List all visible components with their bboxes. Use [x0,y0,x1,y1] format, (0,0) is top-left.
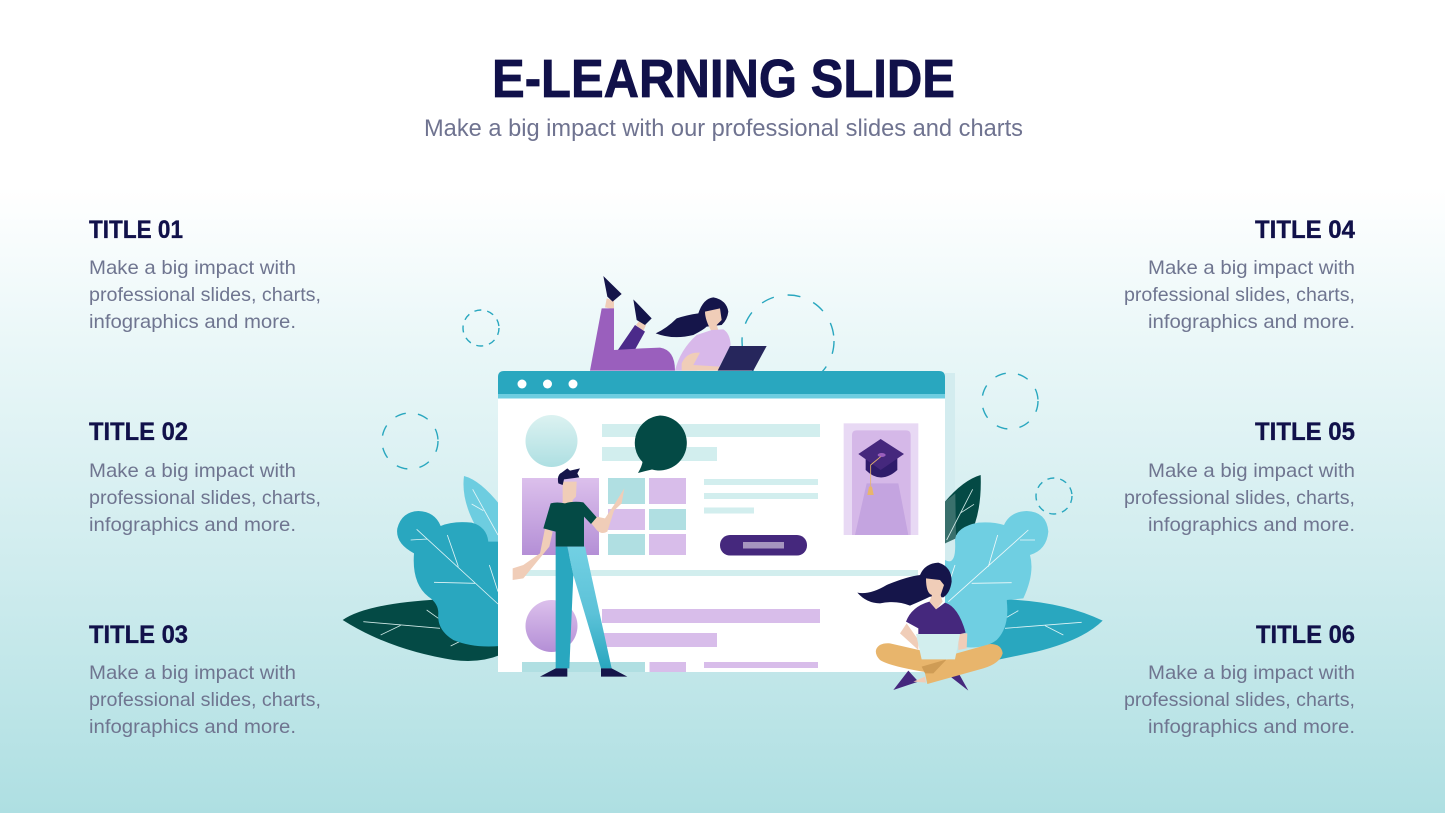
text block: title 03: professional slides, charts, [89,689,321,711]
text block: title 02: infographics and more. [89,514,296,536]
text block: title 05: TITLE 05 [1255,418,1355,446]
text block: title 03 [89,621,321,738]
text block: title 06 [1124,621,1355,738]
text block: title 01: Make a big impact with [89,257,296,279]
text block: title 04 [1124,216,1355,333]
text block: title 05: infographics and more. [1148,514,1355,536]
text block: title 06: Make a big impact with [1148,662,1355,684]
text block: title 02: Make a big impact with [89,460,296,482]
speech bubble [635,416,687,473]
text block: title 02 [89,418,321,536]
subtitle: Make a big impact with our professional slides and charts [424,115,1023,142]
text block: title 04: infographics and more. [1148,311,1355,333]
browser window [498,371,945,672]
text block: title 01: infographics and more. [89,311,296,333]
text block: title 02: professional slides, charts, [89,487,321,509]
text block: title 06: professional slides, charts, [1124,689,1355,711]
text block: title 01: professional slides, charts, [89,284,321,306]
left foliage [343,476,500,661]
graduation cap card [844,423,918,535]
text block: title 04: TITLE 04 [1255,216,1355,244]
text block: title 01 [89,216,321,333]
text block: title 06: infographics and more. [1148,716,1355,738]
text block: title 03: infographics and more. [89,716,296,738]
woman lying on window [590,276,767,371]
woman sitting with laptop [857,563,1003,691]
dashed circles [382,295,1072,514]
text block: title 04: Make a big impact with [1148,257,1355,279]
title: E-LEARNING SLIDE [492,49,955,109]
text block: title 02: TITLE 02 [89,418,188,446]
man pointing [513,468,627,677]
text block: title 05 [1124,418,1355,536]
text block: title 04: professional slides, charts, [1124,284,1355,306]
right foliage [945,475,1103,660]
text block: title 05: Make a big impact with [1148,460,1355,482]
text block: title 06: TITLE 06 [1256,621,1355,649]
text block: title 05: professional slides, charts, [1124,487,1355,509]
window shadow [945,373,955,672]
text block: title 03: TITLE 03 [89,621,188,649]
text block: title 03: Make a big impact with [89,662,296,684]
text block: title 01: TITLE 01 [89,216,183,244]
